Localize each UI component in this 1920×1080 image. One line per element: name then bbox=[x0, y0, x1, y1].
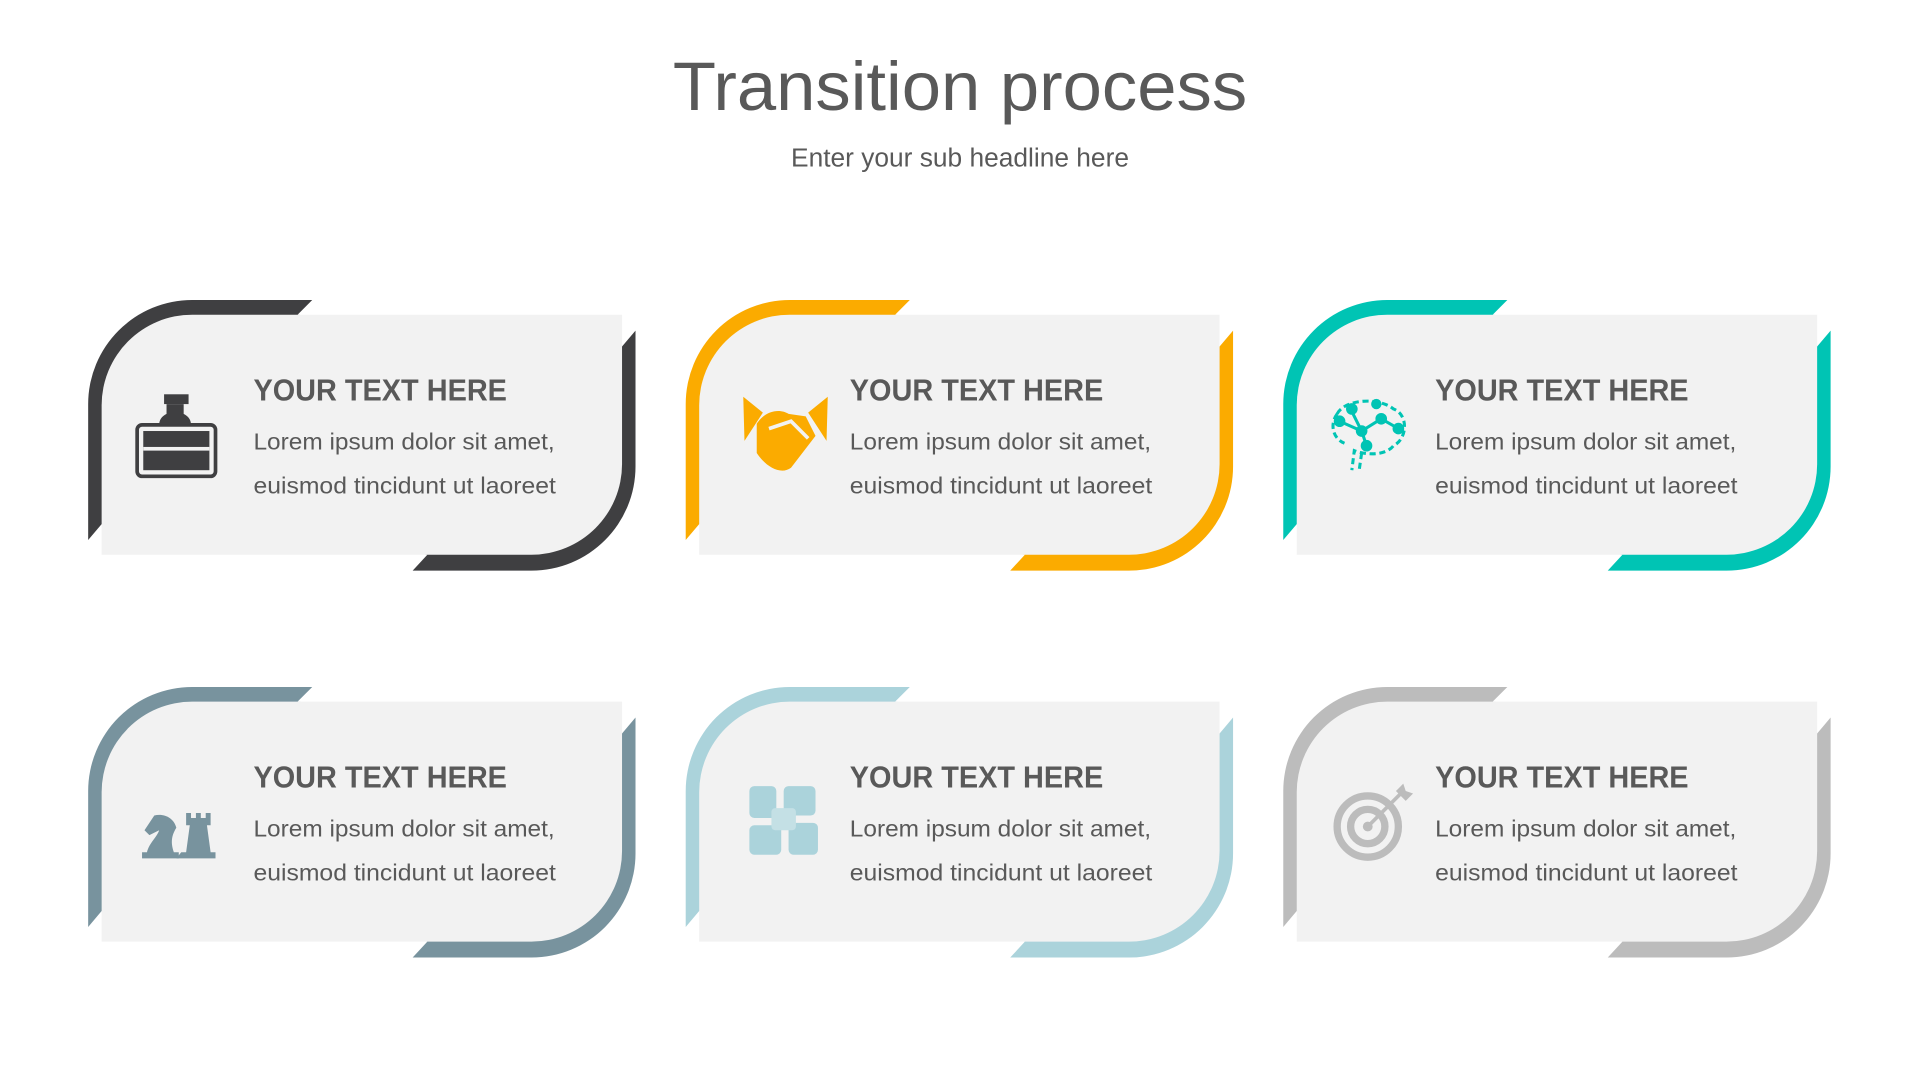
panel: card 2: euismod tincidunt ut laoreet bbox=[850, 472, 1153, 498]
panel: card 3 bbox=[1283, 300, 1831, 571]
panel: card 1 bbox=[88, 300, 636, 571]
icon: handshake bbox=[743, 397, 828, 471]
panel: card 4: euismod tincidunt ut laoreet bbox=[253, 859, 556, 885]
text block: Lorem ipsum dolor sit amet, bbox=[850, 815, 1151, 841]
panel: card 5 bbox=[686, 687, 1233, 958]
heading: YOUR TEXT HERE bbox=[1435, 760, 1689, 794]
heading: YOUR TEXT HERE bbox=[850, 373, 1103, 407]
subtitle: Enter your sub headline here bbox=[791, 145, 1129, 173]
heading: YOUR TEXT HERE bbox=[850, 760, 1103, 794]
text block: Lorem ipsum dolor sit amet, bbox=[1435, 815, 1736, 841]
heading: YOUR TEXT HERE bbox=[253, 373, 507, 407]
heading: YOUR TEXT HERE bbox=[1435, 373, 1689, 407]
title: Transition process bbox=[673, 48, 1247, 125]
icon: chess pieces bbox=[142, 813, 216, 858]
text block: Lorem ipsum dolor sit amet, bbox=[253, 428, 555, 454]
text block: Lorem ipsum dolor sit amet, bbox=[850, 428, 1151, 454]
panel: card 1: euismod tincidunt ut laoreet bbox=[253, 472, 556, 498]
text block: Lorem ipsum dolor sit amet, bbox=[1435, 428, 1736, 454]
panel: card 4 bbox=[88, 687, 636, 958]
panel: card 2 bbox=[686, 300, 1233, 571]
icon: hands together bbox=[749, 786, 818, 855]
icon: briefcase bbox=[137, 394, 216, 476]
panel: card 3: euismod tincidunt ut laoreet bbox=[1435, 472, 1738, 498]
text block: Lorem ipsum dolor sit amet, bbox=[253, 815, 555, 841]
heading: YOUR TEXT HERE bbox=[253, 760, 507, 794]
panel: card 5: euismod tincidunt ut laoreet bbox=[850, 859, 1153, 885]
panel: card 6 bbox=[1283, 687, 1831, 958]
icon: target bbox=[1337, 784, 1413, 857]
icon: brain bbox=[1333, 400, 1404, 470]
panel: card 6: euismod tincidunt ut laoreet bbox=[1435, 859, 1738, 885]
